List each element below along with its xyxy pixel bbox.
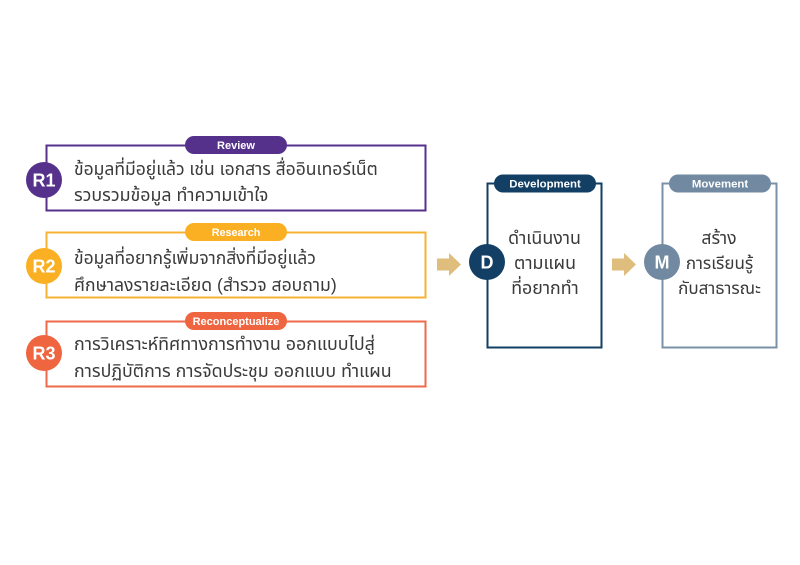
text block: R3 description: การปฏิบัติการ การจัดประชุม ออกแบบ ทำแผน [74,361,392,382]
text block: R3 description [74,334,392,382]
panel: development [469,174,602,348]
icon: M badge [644,244,680,280]
heading: Review: Review [217,140,255,152]
icon: D badge: D [480,252,494,272]
text block: movement description: สร้าง [701,228,737,248]
icon: R2 badge: R2 [32,256,56,276]
heading: Research: Research [212,227,260,239]
heading: Movement [669,174,771,192]
icon: R1 badge [26,162,62,198]
icon: R1 badge: R1 [32,170,56,190]
text block: R2 description: ศึกษาลงรายละเอียด (สำรวจ สอบถาม) [74,275,337,295]
text block: R2 description [74,246,337,295]
heading: Development: Development [509,178,581,190]
icon: M badge: M [654,252,670,272]
icon: R3 badge: R3 [32,344,56,364]
icon: D badge [469,244,505,280]
heading: Development [494,174,596,192]
text block: movement description: กับสาธารณะ [678,279,761,298]
text block: R3 description: การวิเคราะห์ทิศทางการทำงาน ออกแบบไปสู่ [74,334,375,356]
heading: Movement: Movement [692,178,748,190]
text block: development description: ตามแผน [514,253,576,273]
arrow: research to development [437,253,461,276]
heading: Review [185,136,287,154]
heading: Reconceptualize: Reconceptualize [193,316,279,328]
text block: R2 description: ข้อมูลที่อยากรู้เพิ่มจากสิ่งที่มีอยู่แล้ว [74,246,316,270]
heading: Reconceptualize [185,312,287,330]
panel: movement [644,174,776,348]
arrow: development to movement [612,253,636,276]
text block: development description: ดำเนินงาน [508,228,581,248]
text block: movement description: การเรียนรู้ [686,253,754,275]
panel: R3 reconceptualize [26,312,426,386]
text block: R1 description [74,157,378,207]
icon: R2 badge [26,248,62,284]
text block: development description: ที่อยากทำ [511,276,579,298]
icon: R3 badge [26,335,62,371]
text block: development description [508,228,581,298]
text block: movement description [678,228,761,298]
panel: R1 review [26,136,426,210]
panel: R2 research [26,223,426,298]
text block: R1 description: รวบรวมข้อมูล ทำความเข้าใจ [74,185,268,207]
heading: Research [185,223,287,241]
text block: R1 description: ข้อมูลที่มีอยู่แล้ว เช่น เอกสาร สื่ออินเทอร์เน็ต [74,157,378,181]
